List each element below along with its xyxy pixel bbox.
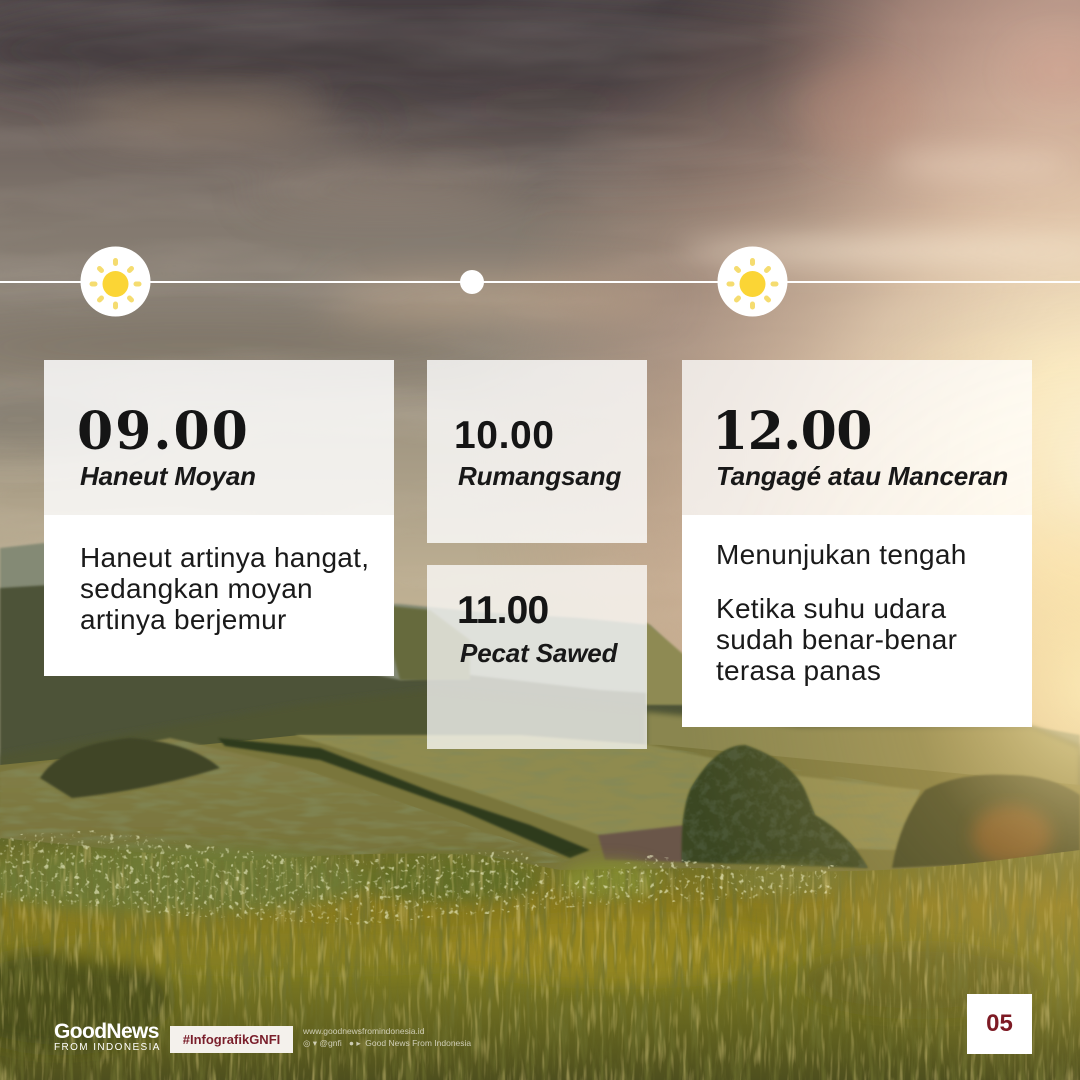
- description 09.00: artinya berjemur: [80, 604, 287, 635]
- logo wordmark: GoodNews: [54, 1020, 159, 1043]
- name Rumangsang: Rumangsang: [458, 461, 621, 491]
- panel: 09.00: [44, 360, 394, 676]
- panel header 12.00: [682, 360, 1032, 515]
- timeline line: [0, 281, 1080, 283]
- icon: sun 12.00: [718, 246, 788, 316]
- description 09.00: sedangkan moyan: [80, 573, 313, 604]
- hashtag label: [170, 1026, 293, 1053]
- time 12.00: 12.00: [712, 401, 872, 462]
- page number: 05: [986, 1010, 1013, 1037]
- hashtag label: #InfografikGNFI: [183, 1032, 280, 1047]
- timeline: [0, 246, 1080, 316]
- description 09.00: Haneut artinya hangat,: [80, 542, 369, 573]
- hills: [0, 543, 1080, 800]
- description meaning: Menunjukan tengah: [716, 539, 967, 570]
- social icons and handles: ◎ ▾ @gnfi ● ▸ Good News From Indonesia: [303, 1038, 471, 1048]
- panel body 12.00: [682, 515, 1032, 727]
- time 09.00: 09.00: [77, 401, 250, 462]
- logo tagline: FROM INDONESIA: [54, 1042, 161, 1053]
- time 11.00: 11.00: [457, 589, 548, 632]
- panel: 11.00: [427, 565, 647, 749]
- description 12.00: [716, 593, 957, 686]
- page number: [967, 994, 1032, 1054]
- description 09.00: [80, 542, 369, 635]
- description 12.00: terasa panas: [716, 655, 881, 686]
- timeline dot: [460, 270, 484, 294]
- footer social info: [303, 1026, 472, 1048]
- time 10.00: 10.00: [454, 414, 555, 457]
- footer logo: [54, 1020, 161, 1053]
- trees: [682, 745, 1080, 868]
- name Tangage atau Manceran: Tangagé atau Manceran: [716, 461, 1008, 491]
- icon: sun 09.00: [80, 246, 150, 316]
- fields: [0, 735, 1080, 890]
- description 12.00: Ketika suhu udara: [716, 593, 946, 624]
- description 12.00: sudah benar-benar: [716, 624, 957, 655]
- website: www.goodnewsfromindonesia.id: [303, 1026, 424, 1036]
- name Pecat Sawed: Pecat Sawed: [460, 638, 617, 668]
- name Haneut Moyan: Haneut Moyan: [80, 461, 256, 491]
- panel body 09.00: [44, 515, 394, 676]
- panel: 12.00: [682, 360, 1032, 727]
- panel: 10.00: [427, 360, 647, 543]
- meadow: [0, 838, 1080, 1080]
- panel header 09.00: [44, 360, 394, 515]
